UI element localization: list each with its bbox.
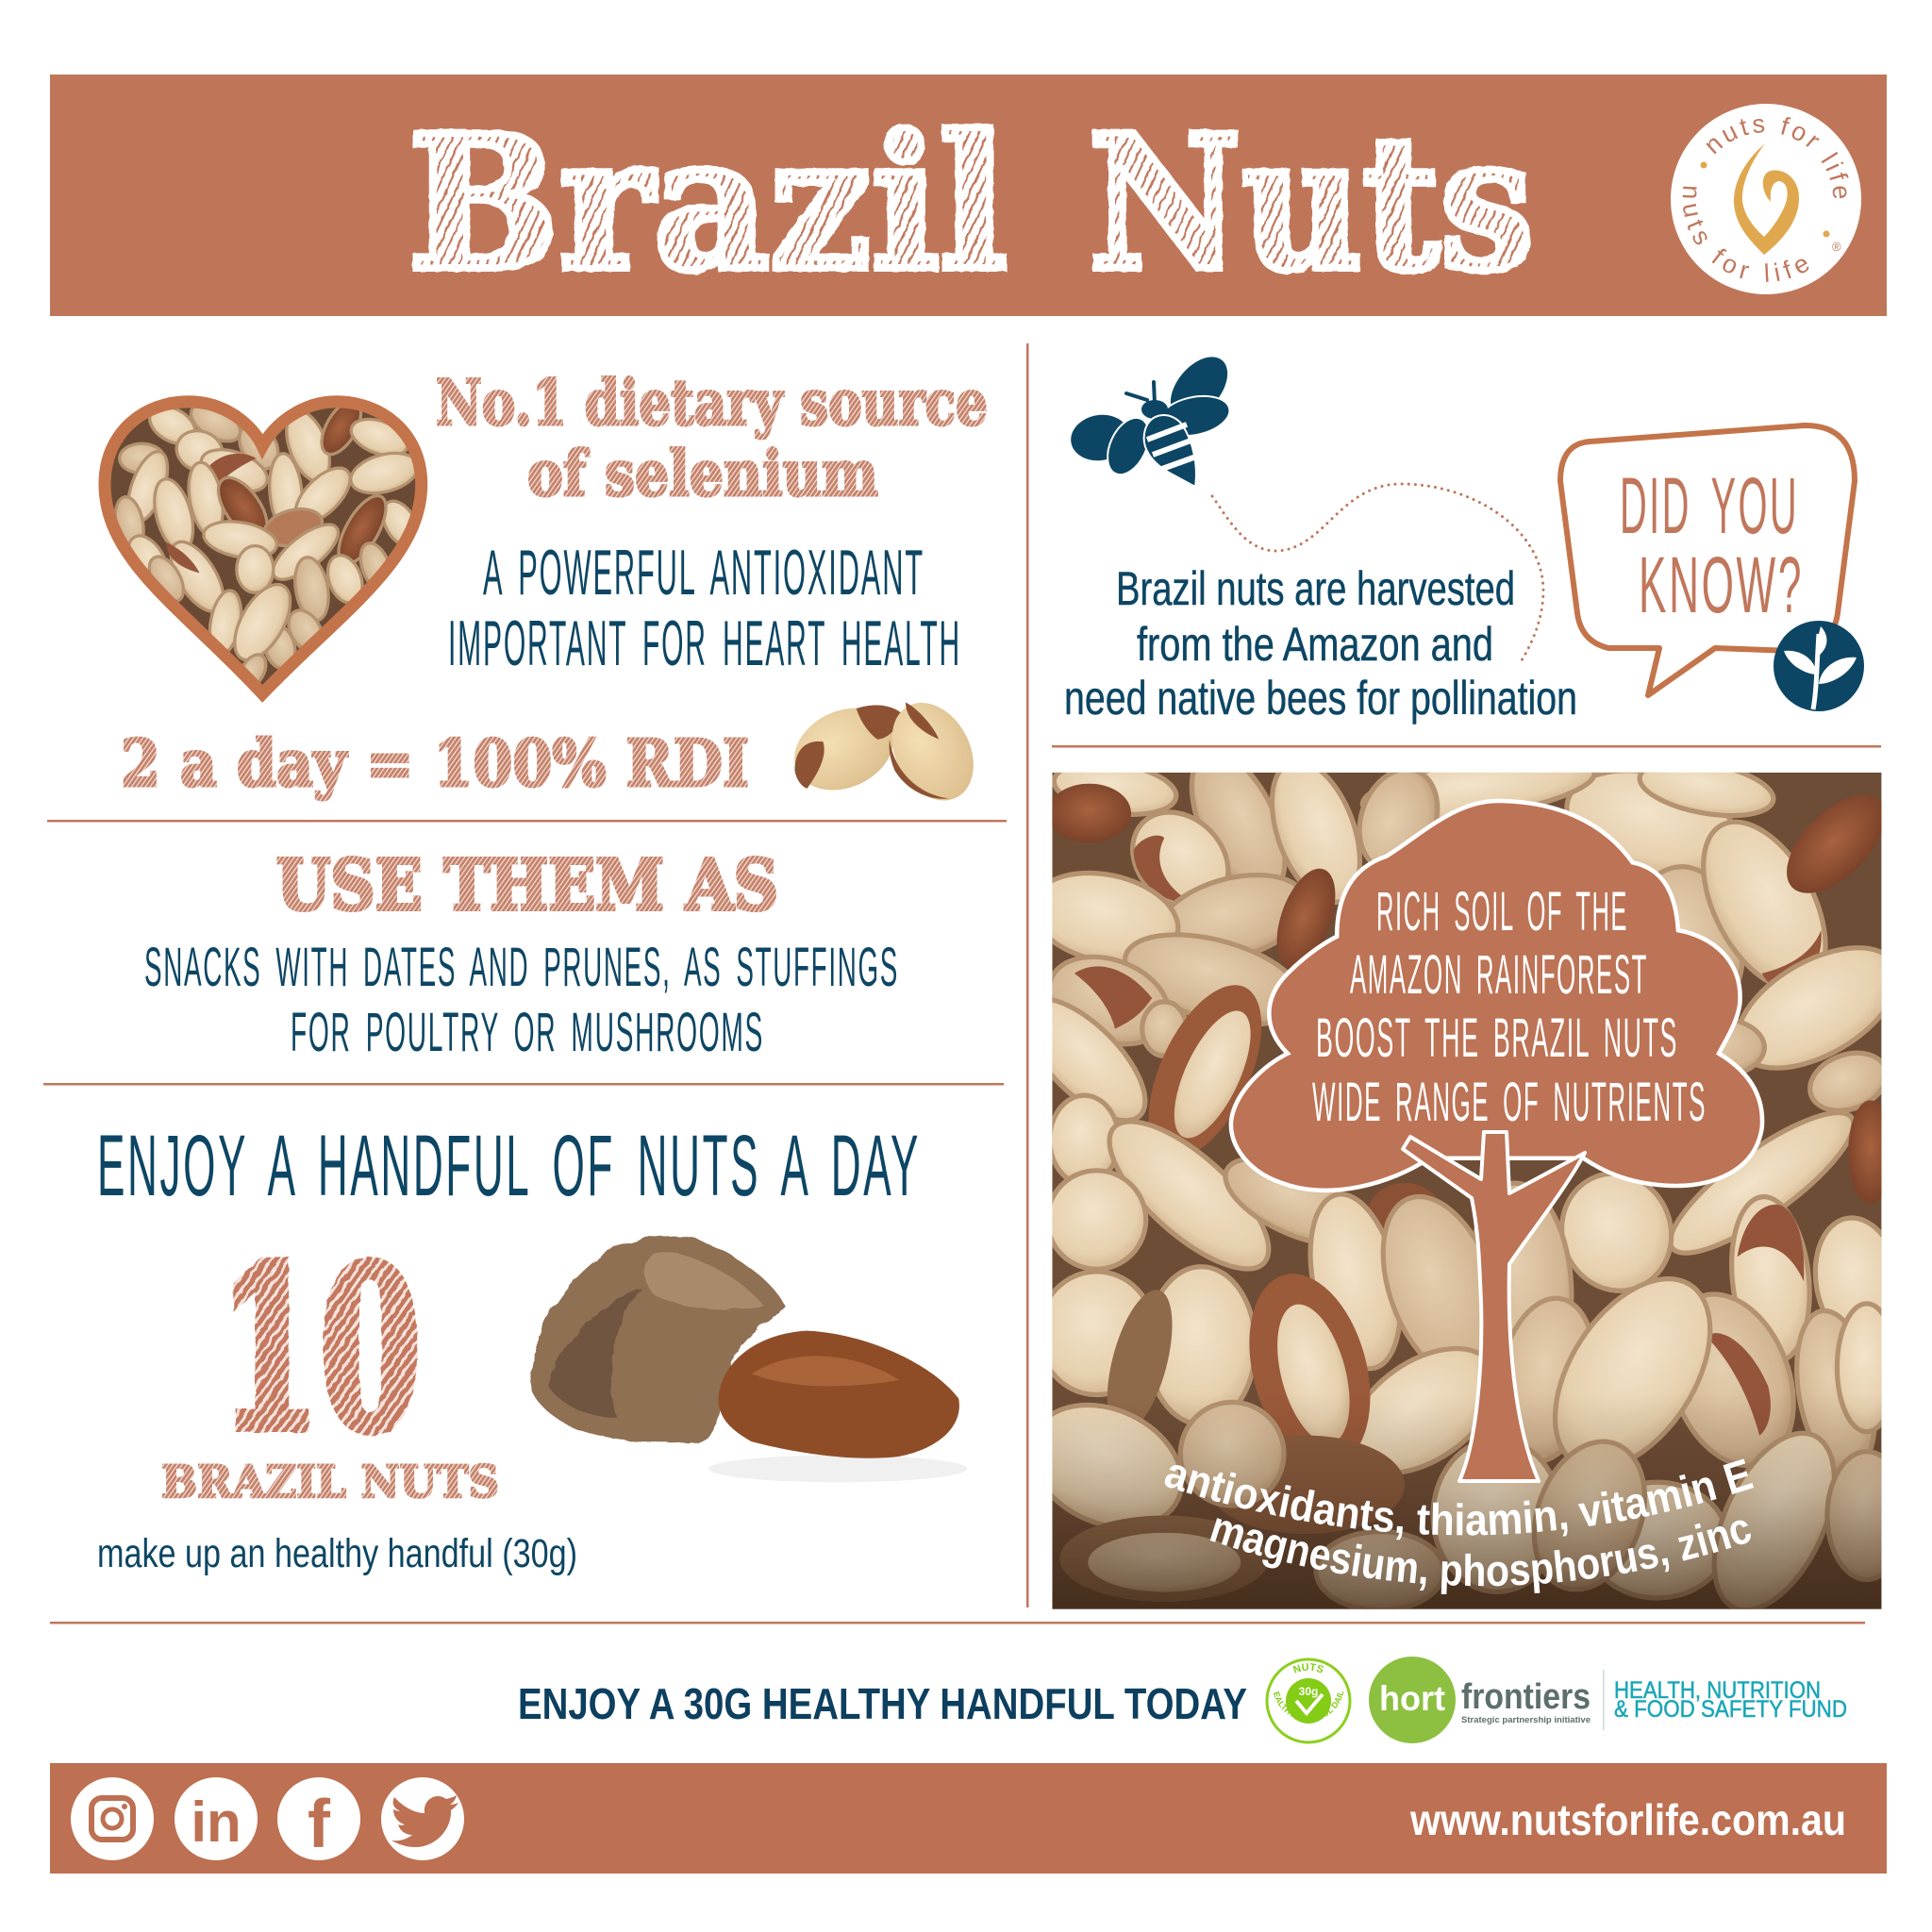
curved nutrient text: antioxidants, thiamin, vitamin E [1164,1458,1754,1540]
speech bubble: did you know [1560,425,1855,695]
badge: healthy handful daily [1266,1658,1351,1743]
heading: No.1 dietary source of selenium: No.1 dietary source [436,366,988,440]
text: 2 a day = 100% RDI: 2 a day = 100% RDI [121,726,749,802]
text: use suggestions: FOR POULTRY OR MUSHROOMS [291,1002,764,1063]
heading: No.1 dietary source of selenium [436,366,988,510]
tree graphic [1231,801,1762,1481]
photo: brazil nuts background [1052,772,1881,1609]
logo: hort frontiers [1369,1657,1604,1743]
logo: nuts for life: ® [1832,240,1841,254]
badge: healthy handful daily: NUTS [1292,1663,1324,1674]
text: use suggestions [144,937,899,1063]
title: Brazil [408,95,1008,312]
tree text: RICH SOIL OF THE [1376,881,1628,942]
image: whole brazil nuts [530,1235,967,1482]
icon: two shelled nuts [781,689,990,815]
text: SNACKS WITH DATES AND PRUNES, AS STUFFINGS [144,937,899,998]
footer tagline: ENJOY A 30G HEALTHY HANDFUL TODAY [518,1679,1247,1728]
logo: nuts for life [1671,104,1861,294]
tree trunk [1403,1132,1585,1481]
column and section dividers [43,343,1881,1624]
icon: leaf badge [1774,621,1864,711]
title: Nuts [1089,95,1534,312]
curved nutrient text [1164,1458,1754,1594]
text: ENJOY A HANDFUL OF NUTS A DAY [97,1118,921,1214]
header banner [50,75,1887,316]
tree text [1312,881,1707,1133]
icon: linkedin [175,1777,258,1860]
nut pile [1052,772,1881,1609]
badge: healthy handful daily: HEALTHY HANDFUL DAILY [1274,1691,1343,1717]
text: health nutrition and food safety fund: HEALTH, NUTRITION [1614,1677,1821,1704]
heading: USE THEM AS: USE THEM AS [276,845,778,926]
text: IMPORTANT FOR HEART HEALTH [448,608,961,679]
icon: facebook [277,1777,360,1862]
text: did you know fact: need native bees for pollination [1064,672,1577,724]
text: antioxidant benefit [448,537,961,679]
logo: nuts for life: nuts for life [1683,187,1809,282]
label: BRAZIL NUTS: BRAZIL NUTS [161,1457,499,1508]
badge: healthy handful daily: 30g [1299,1685,1318,1698]
footer bar [50,1763,1887,1874]
heart filled with brazil nuts [98,394,431,708]
text: handful amount: make up an healthy handful (30g) [97,1531,577,1576]
tree canopy [1231,801,1762,1191]
website url: www.nutsforlife.com.au [1409,1795,1846,1844]
big number 10: 10 [219,1218,421,1480]
icon: twitter [381,1777,464,1860]
logo: hort frontiers: hort [1379,1679,1445,1718]
icon: instagram [71,1777,154,1860]
curved nutrient text: magnesium, phosphorus, zinc [1209,1518,1751,1594]
heading: No.1 dietary source of selenium: of selenium [527,437,878,510]
text: health nutrition and food safety fund: & FOOD SAFETY FUND [1614,1696,1847,1723]
text: did you know fact [1064,562,1577,724]
icon: linkedin: in [191,1790,242,1854]
text: health nutrition and food safety fund [1614,1677,1847,1723]
arrow: dotted bee flight path [1212,484,1543,660]
icon: facebook: f [308,1787,331,1862]
text: A POWERFUL ANTIOXIDANT [483,537,924,608]
text: did you know fact: Brazil nuts are harvested [1116,562,1515,615]
logo: hort frontiers: frontiers [1461,1677,1591,1717]
logo: nuts for life: nuts for life [1706,117,1849,198]
logo: hort frontiers: Strategic partnership initiative [1461,1715,1591,1725]
icon: bee [1067,346,1239,487]
text: did you know fact: from the Amazon and [1137,618,1493,671]
title [408,95,1534,312]
